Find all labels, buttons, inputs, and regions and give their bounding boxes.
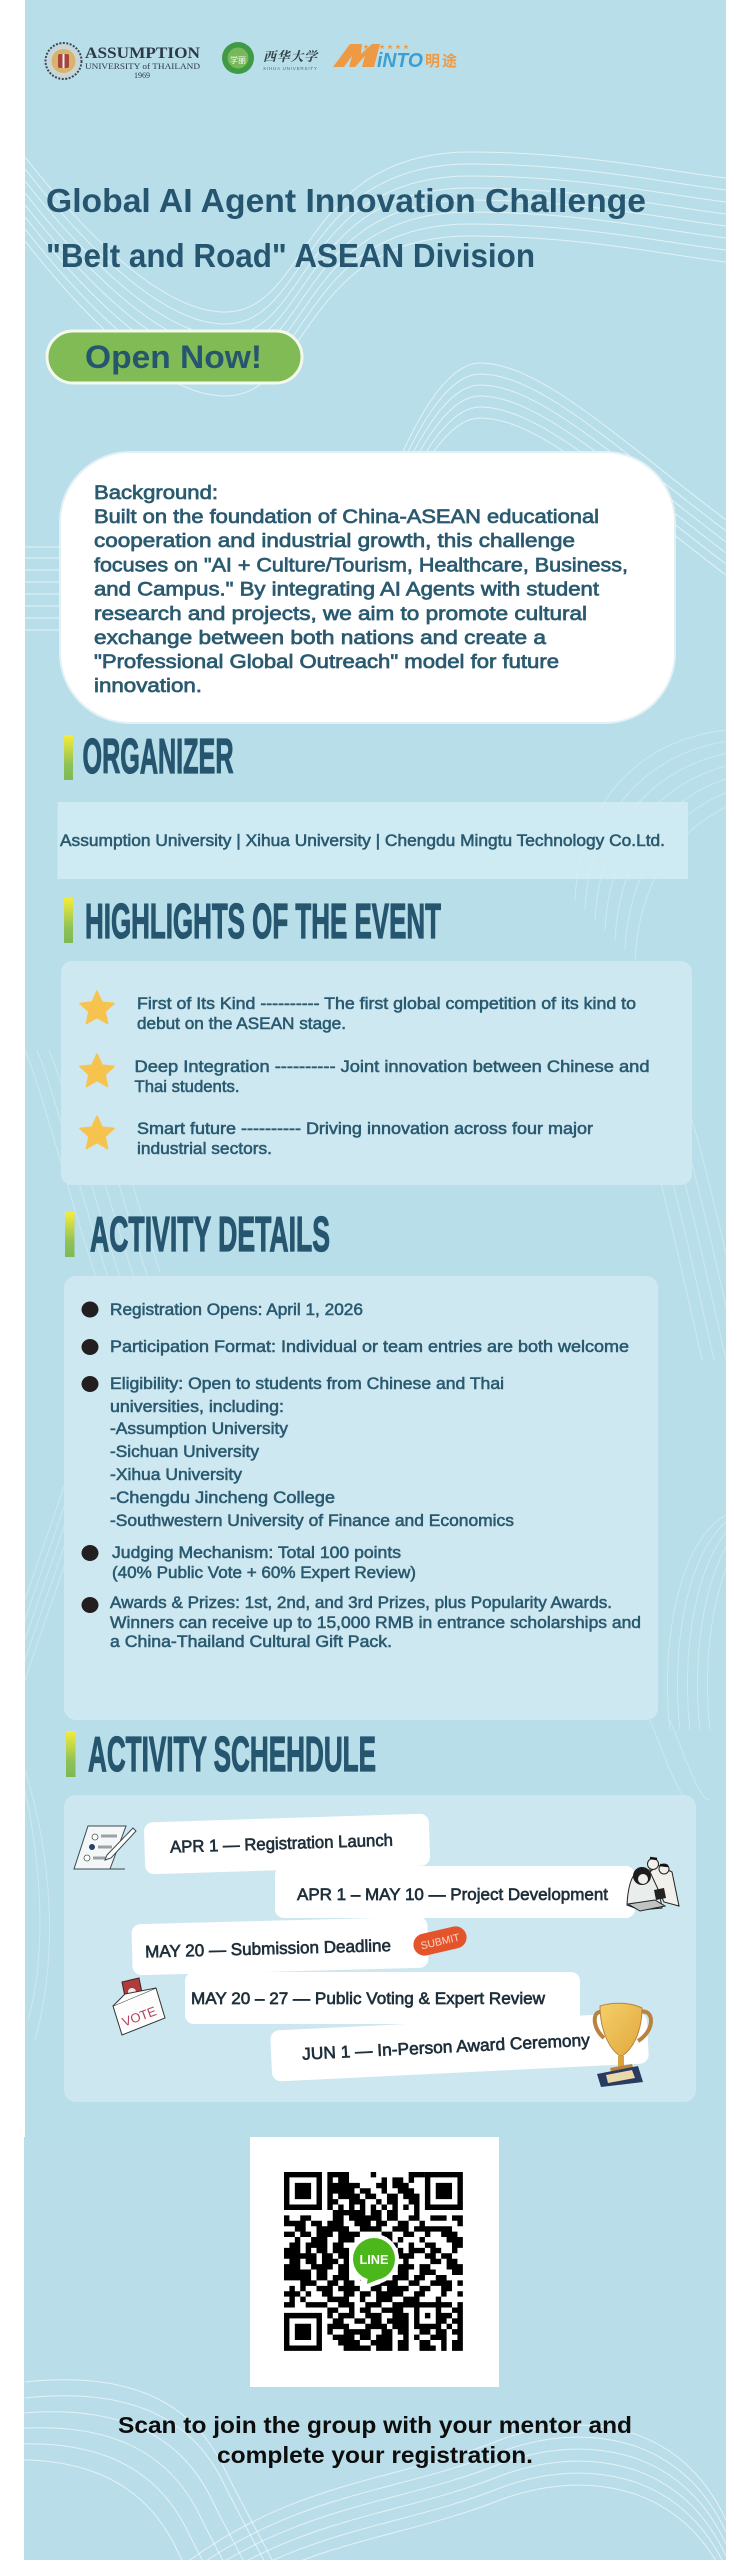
bullet: awards: a China-Thailand Cultural Gift Pack. <box>110 1633 392 1651</box>
step: award ceremony: JUN 1 — In-Person Award Ceremony <box>302 2031 591 2064</box>
highlight 3 <box>80 1116 594 1158</box>
panel: background: Background: <box>94 482 218 504</box>
bullet: judging: Judging Mechanism: Total 100 points <box>112 1544 401 1562</box>
heading: activity details: ACTIVITY DETAILS <box>90 1208 330 1262</box>
panel: background: cooperation and industrial growth, this challenge <box>94 530 575 552</box>
highlight 2: Deep Integration ---------- Joint innovation between Chinese and <box>134 1058 650 1076</box>
panel: background: innovation. <box>94 675 202 697</box>
icon: form and pen <box>74 1826 136 1869</box>
step: registration launch: APR 1 — Registration Launch <box>170 1831 393 1857</box>
title <box>46 182 646 274</box>
bullet: awards <box>82 1594 641 1651</box>
icon: vote box: VOTE <box>120 2003 159 2030</box>
panel: QR code <box>250 2137 499 2387</box>
heading: organizer: ORGANIZER <box>82 730 233 784</box>
logo: Minto: 明途 <box>425 50 457 71</box>
bullet: awards: Winners can receive up to 15,000 RMB in entrance scholarships and <box>110 1614 641 1632</box>
heading: highlights: HIGHLIGHTS OF THE EVENT <box>85 895 441 949</box>
logo: Assumption University: UNIVERSITY of THAILAND <box>85 61 200 71</box>
logo: Assumption University <box>46 43 200 80</box>
bullet: eligibility <box>82 1375 514 1530</box>
badge: submit: SUBMIT <box>420 1932 461 1952</box>
step: registration launch <box>144 1814 430 1874</box>
step: submission deadline: MAY 20 — Submission Deadline <box>145 1936 391 1962</box>
panel: background: Built on the foundation of China-ASEAN educational <box>94 506 599 528</box>
button: Open Now: Open Now! <box>85 339 262 375</box>
heading: organizer <box>64 730 233 784</box>
icon: LINE logo <box>349 2234 399 2288</box>
badge: submit <box>411 1924 469 1958</box>
bullet: participation: Participation Format: Individual or team entries are both welcome <box>110 1338 629 1356</box>
logo: Minto <box>333 44 457 72</box>
heading: activity schedule <box>66 1728 376 1782</box>
bullet: awards: Awards & Prizes: 1st, 2nd, and 3rd Prizes, plus Popularity Awards. <box>110 1594 612 1612</box>
icon: vote box <box>113 1978 165 2035</box>
heading: highlights <box>64 895 441 949</box>
icon: trophy <box>595 2003 651 2087</box>
bullet: eligibility: -Sichuan University <box>110 1443 260 1461</box>
logo: Assumption University: 1969 <box>134 71 150 80</box>
step: public voting: MAY 20 – 27 — Public Voting & Expert Review <box>191 1989 546 2008</box>
logos row <box>46 42 457 80</box>
bullet: judging: (40% Public Vote + 60% Expert Review) <box>112 1564 416 1582</box>
step: public voting <box>185 1972 580 2024</box>
panel: background: focuses on "AI + Culture/Tourism, Healthcare, Business, <box>94 554 628 576</box>
icon: LINE logo: LINE <box>360 2253 388 2267</box>
panel: activity details <box>64 1276 658 1720</box>
panel: organizer names <box>58 802 688 879</box>
QR matrix <box>284 2172 463 2351</box>
logo: Minto: iNTO <box>377 50 423 72</box>
panel: background: "Professional Global Outreach" model for future <box>94 651 559 673</box>
highlight 3: Smart future ---------- Driving innovation across four major <box>137 1120 594 1138</box>
highlight 2 <box>80 1054 649 1096</box>
highlight 2: Thai students. <box>134 1078 240 1096</box>
bullet: eligibility: -Xihua University <box>110 1466 243 1484</box>
panel: background: exchange between both nations and create a <box>94 627 546 649</box>
logo: Xihua University: XIHUA UNIVERSITY <box>263 66 317 71</box>
call to action text: complete your registration. <box>217 2442 533 2468</box>
panel: schedule <box>64 1795 696 2102</box>
bullet: eligibility: -Southwestern University of Finance and Economics <box>110 1512 514 1530</box>
title: Global AI Agent Innovation Challenge <box>46 182 646 219</box>
panel: background <box>60 452 675 723</box>
bullet: judging <box>82 1544 416 1582</box>
highlight 1 <box>80 991 636 1033</box>
heading: activity details <box>65 1208 330 1262</box>
bullet: eligibility: -Assumption University <box>110 1420 289 1438</box>
highlight 3: industrial sectors. <box>137 1140 272 1158</box>
step: project development <box>275 1866 635 1918</box>
step: project development: APR 1 – MAY 10 — Project Development <box>297 1885 608 1904</box>
panel: background: research and projects, we aim to promote cultural <box>94 603 587 625</box>
call to action text: Scan to join the group with your mentor and <box>118 2412 632 2438</box>
heading: activity schedule: ACTIVITY SCHEHDULE <box>88 1728 376 1782</box>
button: Open Now <box>47 331 302 383</box>
logo: Minto: ★★★★★★ <box>363 44 409 51</box>
step: award ceremony <box>270 2012 649 2082</box>
panel: highlights <box>61 961 692 1185</box>
bullet: eligibility: universities, including: <box>110 1398 284 1416</box>
call to action text <box>118 2412 632 2468</box>
bullet: eligibility: -Chengdu Jincheng College <box>110 1489 335 1507</box>
logo: Xihua University: 西华大学 <box>263 46 319 65</box>
bullet: registration: Registration Opens: April 1, 2026 <box>110 1301 363 1319</box>
panel: organizer names: Assumption University | Xihua University | Chengdu Mingtu Technology Co.Ltd. <box>60 832 665 850</box>
bullet: eligibility: Eligibility: Open to students from Chinese and Thai <box>110 1375 504 1393</box>
logo: Assumption University: ASSUMPTION <box>85 45 200 62</box>
step: submission deadline <box>131 1917 429 1975</box>
icon: students group <box>627 1858 679 1911</box>
highlight 1: debut on the ASEAN stage. <box>137 1015 346 1033</box>
logo: Xihua University: 学丽 <box>230 55 246 66</box>
highlight 1: First of Its Kind ---------- The first global competition of its kind to <box>137 995 636 1013</box>
panel: background: and Campus." By integrating AI Agents with student <box>94 578 600 600</box>
title: "Belt and Road" ASEAN Division <box>46 237 535 274</box>
logo: Xihua University <box>222 42 319 74</box>
